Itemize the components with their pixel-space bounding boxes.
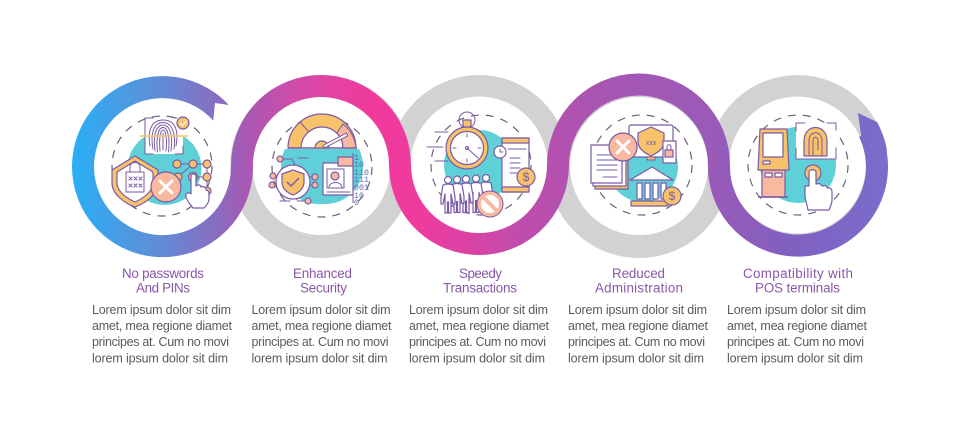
step 1 body text: lorem ipsum dolor sit dim [92, 352, 228, 366]
step 3 body text: Lorem ipsum dolor sit dim [409, 303, 548, 317]
binary digits: 0 [354, 199, 359, 208]
step 2 heading: Enhanced [293, 266, 352, 281]
step 5 body text: principes at. Cum no movi [727, 335, 864, 349]
step 2 heading: Security [300, 280, 347, 296]
icon: cross badge [609, 133, 637, 161]
binary digits: 10 [354, 192, 364, 201]
step 3 body text: principes at. Cum no movi [409, 335, 546, 349]
step 2 heading [293, 266, 352, 296]
step 4 body text: amet, mea regione diamet [568, 319, 709, 333]
binary digits: 001 [354, 184, 369, 193]
step 4 body text: lorem ipsum dolor sit dim [568, 352, 704, 366]
icon: ID card [323, 157, 353, 195]
icon: prohibition sign [477, 191, 503, 217]
step 2 body text: lorem ipsum dolor sit dim [252, 352, 388, 366]
step 4 body text [568, 303, 709, 366]
icon: enhanced security [269, 114, 372, 217]
gradient ribbon arrow [83, 85, 887, 246]
step 3 body text: lorem ipsum dolor sit dim [409, 352, 545, 366]
step 5 body text: Lorem ipsum dolor sit dim [727, 303, 866, 317]
step 3 heading: Transactions [443, 280, 517, 296]
step 5 body text: lorem ipsum dolor sit dim [727, 352, 863, 366]
step 4 heading: Administration [595, 280, 683, 296]
step 3 heading: Speedy [459, 266, 502, 281]
step 5 body text: amet, mea regione diamet [727, 319, 868, 333]
step 1 heading: No passwords [122, 266, 204, 281]
icon: stopwatch [427, 112, 488, 169]
icon: fingerprint scan [796, 123, 836, 159]
white circle discs [94, 96, 866, 235]
icon: shield circuit [269, 156, 318, 204]
step 2 body text: principes at. Cum no movi [252, 335, 388, 349]
binary digits: 10 [354, 161, 364, 170]
step 1 body text: Lorem ipsum dolor sit dim [92, 303, 231, 317]
step 4 body text: Lorem ipsum dolor sit dim [568, 303, 707, 317]
step 3 body text [409, 303, 550, 366]
binary digits: 1 [354, 154, 359, 163]
icon: bank: $ [669, 189, 676, 203]
step 3 heading [443, 266, 517, 296]
icon: cross badge [151, 172, 181, 202]
icon: phone checklist and coin: $ [523, 170, 530, 184]
icon: shield with lock [112, 156, 158, 207]
step 2 body text: amet, mea regione diamet [252, 319, 392, 333]
icon: pointing hand [805, 165, 832, 210]
binary digits: 110 [354, 169, 369, 178]
icon: kiosk [758, 129, 789, 197]
icon: no passwords [112, 116, 212, 216]
icon: reduced administration [591, 115, 692, 215]
step 1 body text: principes at. Cum no movi [92, 335, 229, 349]
icon: monitor with shield: xxx [646, 140, 657, 147]
step 5 heading [743, 266, 853, 296]
step 4 heading [595, 266, 683, 296]
binary digits: 111 [354, 176, 369, 185]
icon: queue of people [441, 174, 493, 213]
step 5 heading: Compatibility with [743, 266, 853, 281]
icon: fingerprint scanner [140, 117, 189, 154]
step 5 body text [727, 303, 868, 366]
step 1 body text [92, 303, 233, 366]
step 1 heading [122, 266, 204, 296]
step 4 heading: Reduced [612, 266, 665, 281]
step 2 body text: Lorem ipsum dolor sit dim [252, 303, 390, 317]
step 1 body text: amet, mea regione diamet [92, 319, 233, 333]
step 4 body text: principes at. Cum no movi [568, 335, 705, 349]
step 3 body text: amet, mea regione diamet [409, 319, 550, 333]
icon: speedy transactions [427, 112, 535, 217]
step 5 heading: POS terminals [755, 280, 840, 296]
icon: POS terminals [748, 115, 848, 215]
icon: pointing hand [186, 174, 209, 208]
binary digits [353, 153, 369, 208]
icon: PIN pattern nodes [173, 160, 211, 195]
icon: stacked documents [591, 145, 628, 189]
step 1 heading: And PINs [136, 280, 190, 296]
icon: gauge [288, 114, 357, 148]
step 2 body text [252, 303, 392, 366]
grey background rings [242, 86, 876, 246]
